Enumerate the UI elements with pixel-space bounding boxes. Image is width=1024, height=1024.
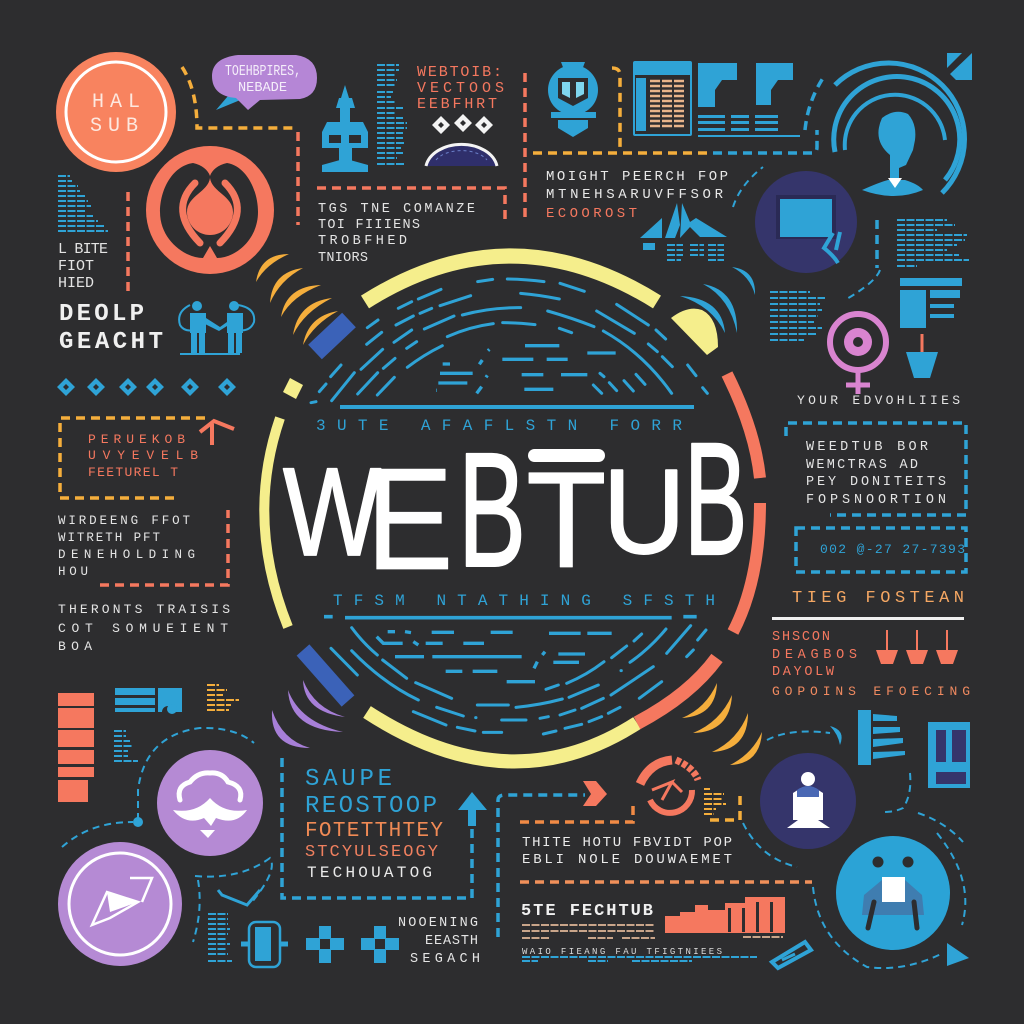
connector: orange short <box>710 796 740 820</box>
text: l bite: HIED <box>58 275 94 292</box>
central ring <box>264 256 760 761</box>
upper rule <box>340 405 694 409</box>
connector: lilac curve <box>138 728 254 820</box>
table icon <box>633 61 692 136</box>
triangle <box>947 943 969 966</box>
heading: tieg fostean: TIEG FOSTEAN <box>792 589 964 608</box>
text: shscon <box>772 630 857 680</box>
icon: statue circle <box>760 753 856 849</box>
heading: ste fechtub: 5TE FECHTUB <box>521 902 653 921</box>
icon: document <box>900 278 962 328</box>
icon: monitor circle <box>755 171 857 273</box>
main title: E <box>366 439 453 600</box>
connector around apron <box>937 833 965 925</box>
text: tgs tne: TNIORS <box>318 251 368 266</box>
text: thite hotu: THITE HOTU FBVIDT POP <box>522 835 732 851</box>
blue waves upper right <box>680 267 755 333</box>
box: perfuence <box>60 418 234 498</box>
connector dashed right <box>845 270 880 300</box>
heading: deolp geacht: GEACHT <box>59 329 163 356</box>
text: moight: MOIGHT PEERCH FOP <box>546 169 728 185</box>
white diamonds <box>432 114 493 134</box>
text: webtoib: VECTOOS <box>417 80 504 97</box>
box: perfuence: FEETUREL T <box>88 465 178 480</box>
text: shscon: DAYOLW <box>772 665 835 680</box>
icon: blue machine <box>858 710 970 788</box>
connector: horizontal orange <box>533 151 710 155</box>
icon: half dome <box>426 144 497 166</box>
icon: coral stack <box>58 693 94 802</box>
icon: checkmark <box>218 890 260 905</box>
icon: coral anatomy circle <box>146 146 274 274</box>
icon: arrow circle <box>58 842 182 966</box>
icon: truck <box>115 688 182 714</box>
pixel diamond row <box>57 378 236 396</box>
lower dashed data arcs <box>324 617 706 734</box>
text: l bite <box>58 241 108 292</box>
connector: tgs <box>317 188 505 222</box>
speech bubble: NEBADE <box>238 80 287 96</box>
fine print: blue under truck <box>114 731 138 761</box>
heading: deolp geacht <box>59 301 163 356</box>
text: l bite: FIOT <box>58 258 94 275</box>
speech bubble: TOEHBPIRES, <box>225 63 301 80</box>
text: theronts: BOA <box>58 639 92 654</box>
text: thite hotu: EBLI NOLE DOUWAEMET <box>522 852 732 868</box>
fine print: bottom <box>522 957 757 961</box>
text: efecting: GOPOINS EFOECING <box>772 684 970 699</box>
box: weedtub: PEY DONITEITS <box>806 475 946 490</box>
text: shscon: DEAGBOS <box>772 648 857 663</box>
main title: B <box>458 419 526 601</box>
connector: left vertical <box>126 192 130 294</box>
box: weedtub <box>786 423 966 515</box>
text: nodening: SEGACH <box>410 952 480 967</box>
text: theronts: THERONTS TRAISIS <box>58 602 230 617</box>
heading: your: YOUR EDVOHLIIES <box>797 393 960 408</box>
text: tgs tne: TOI FIIIENS <box>318 218 420 233</box>
fine print: left column <box>58 176 108 231</box>
fine print: left of target <box>770 292 825 340</box>
lower subtitle: TFSM NTATHING SFSTH <box>333 592 715 610</box>
icon: cloud circle <box>157 750 263 856</box>
text: wirdeeng <box>58 514 195 579</box>
main title: W <box>283 443 382 582</box>
fine print: lower left <box>208 914 232 961</box>
box: phone: 002 @-27 27-7393 <box>820 542 965 557</box>
connector orange <box>520 806 633 822</box>
text: wirdeeng: HOU <box>58 565 88 579</box>
icon: small plant <box>906 334 938 378</box>
text: wirdeeng: WITRETH PFT <box>58 531 160 545</box>
icon: head rings <box>834 63 964 196</box>
heading: deolp geacht: DEOLP <box>59 301 144 328</box>
caption: WAIO FIEANG FAU TFIGTNIEES <box>522 947 722 957</box>
upper dashed data arcs <box>311 279 707 403</box>
orange waves lower right <box>682 683 762 765</box>
text: nodening: NOOENING <box>398 916 478 931</box>
box: weedtub: FOPSNOORTION <box>806 493 946 508</box>
connector: top of machine <box>767 726 842 745</box>
connector to arrow <box>498 781 607 937</box>
text: saupe block: REOSTOOP <box>305 793 437 820</box>
main title: U <box>603 444 685 579</box>
text: wirdeeng: WIRDEENG FFOT <box>58 514 190 528</box>
connector: dashed to monitor <box>733 167 763 207</box>
rule <box>772 617 964 620</box>
text: shscon: SHSCON <box>772 630 830 645</box>
icon: p shapes <box>698 63 800 137</box>
upper subtitle: 3UTE AFAFLSTN FORR <box>316 417 682 435</box>
text: nodening: EEASTH <box>425 934 478 949</box>
connector: coral vertical <box>523 73 527 217</box>
box: perfuence: UVYEVELB <box>88 448 198 463</box>
badge: hal sub: SUB <box>90 115 138 138</box>
orange waves upper left <box>256 254 338 345</box>
hanging icons <box>876 630 958 664</box>
fine print: blue column <box>377 65 407 164</box>
connector: lilac lower <box>62 817 143 847</box>
text: saupe block: SAUPE <box>305 766 392 793</box>
text: webtoib <box>417 64 504 113</box>
fine print: skyline <box>743 936 783 938</box>
icon: target <box>830 314 886 394</box>
title accent bar <box>528 449 605 462</box>
text: tgs tne: TROBFHED <box>318 234 407 249</box>
connector: blue around <box>813 887 943 968</box>
text: wirdeeng: DENEHOLDING <box>58 548 195 562</box>
icon: shield lamp <box>548 62 598 137</box>
connector: blue curve <box>743 823 797 867</box>
icon: rocket <box>322 85 368 172</box>
fine print: right top <box>897 220 969 266</box>
badge: hal sub <box>56 52 176 172</box>
text: l bite: L BITE <box>58 241 108 258</box>
icon: bracket device <box>241 922 288 967</box>
fine print: roof <box>667 245 724 260</box>
speech bubble <box>212 55 317 110</box>
main title <box>283 409 747 601</box>
box: perfuence: PERUEKOB <box>88 432 185 447</box>
connector: upper right of apron <box>883 773 963 842</box>
text: moight: MTNEHSARUVFFSOR <box>546 187 724 203</box>
plus icons <box>306 926 399 963</box>
skyline <box>665 897 785 933</box>
connector: blue extension <box>713 75 825 153</box>
badge: hal sub: HAL <box>92 91 140 114</box>
icon: gear <box>640 760 698 813</box>
box: weedtub: WEEDTUB BOR <box>806 440 928 455</box>
text: saupe block <box>305 766 443 882</box>
main title: T <box>526 443 607 597</box>
connector: wirdeeng <box>100 510 228 585</box>
text: thite hotu <box>522 835 732 868</box>
fine print: orange <box>704 789 726 814</box>
text: tgs tne <box>318 202 475 266</box>
text: nodening <box>398 916 480 967</box>
text: theronts <box>58 602 230 654</box>
connector: top left descent <box>296 132 300 225</box>
text: moight: ECOOROST <box>546 206 637 222</box>
box: phone <box>796 528 966 572</box>
text: theronts: COT SOMUEIENT <box>58 621 228 636</box>
main title: B <box>684 409 747 588</box>
text: saupe block: TECHOUATOG <box>307 864 432 882</box>
dashed row <box>520 880 812 884</box>
connector: blue vertical <box>875 220 879 268</box>
icon: tool <box>772 942 811 968</box>
connector: top center orange <box>612 68 620 147</box>
icon: two people <box>179 301 254 355</box>
box: weedtub: WEMCTRAS AD <box>806 458 918 473</box>
text: saupe block: STCYULSEOGY <box>305 843 438 862</box>
text: saupe block: FOTETTHTEY <box>305 820 443 843</box>
connector arrow up <box>282 758 487 898</box>
icon: roof <box>640 203 727 250</box>
text: webtoib: WEBTOIB: <box>417 64 502 81</box>
corner triangle <box>947 53 972 80</box>
text: webtoib: EEBFHRT <box>417 96 497 113</box>
text: moight <box>546 169 728 222</box>
connector: check and tail <box>193 858 272 942</box>
fine print: heading <box>522 925 655 938</box>
text: tgs tne: TGS TNE COMANZE <box>318 202 475 217</box>
icon: apron circle <box>836 836 950 950</box>
connector: top left <box>182 67 296 128</box>
purple waves lower left <box>272 680 345 748</box>
fine print: coral <box>207 685 239 710</box>
